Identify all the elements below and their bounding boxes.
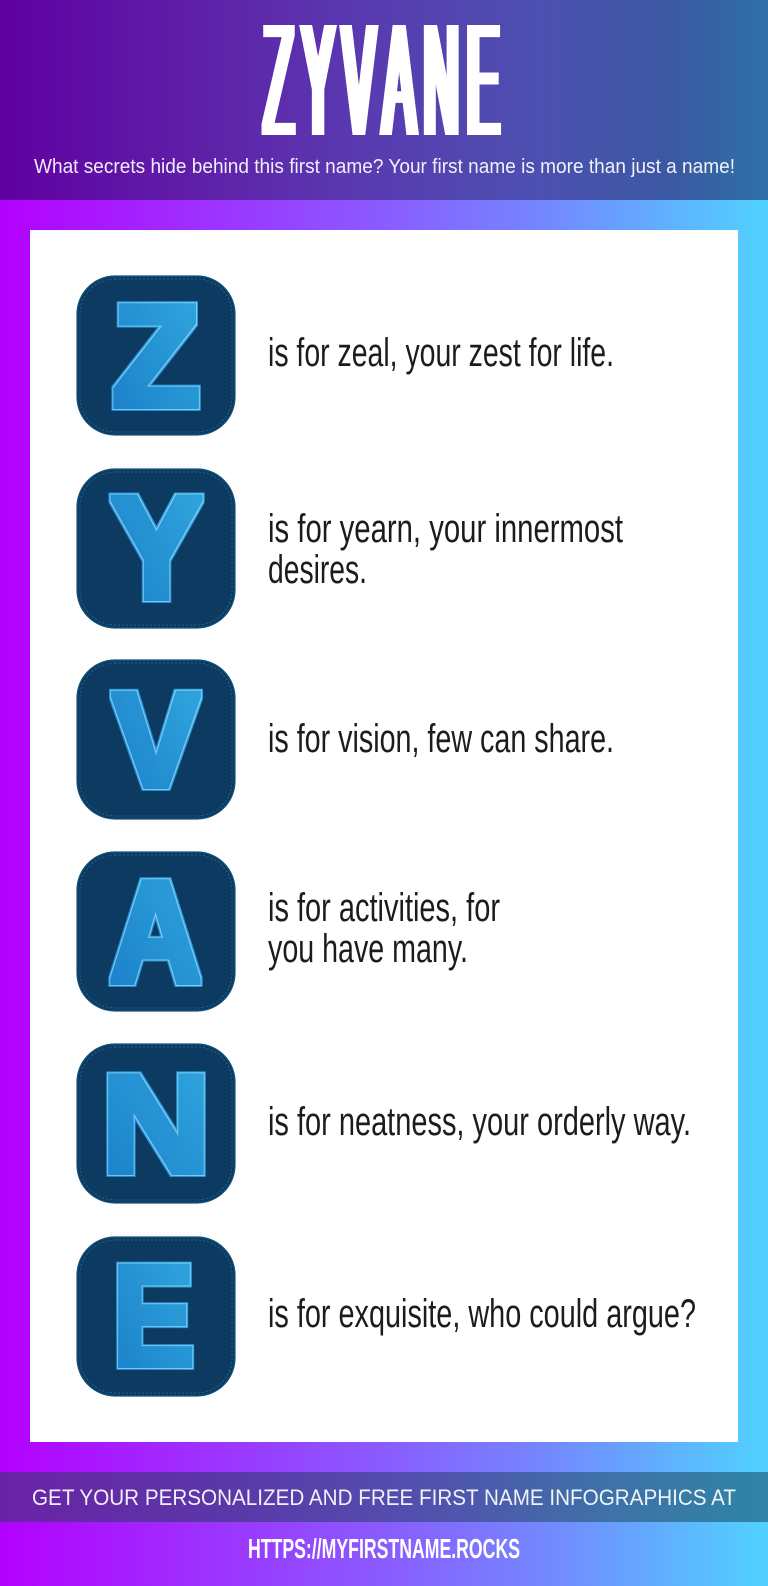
footer call to action: GET YOUR PERSONALIZED AND FREE FIRST NAME INFOGRAPHICS AT [32, 1485, 736, 1510]
icon: letter V: V [113, 666, 199, 815]
header band [0, 0, 768, 200]
text: Y meaning: is for yearn, your innermost [268, 507, 623, 551]
panel: letter meanings [30, 230, 738, 1442]
icon: letter N: N [101, 1047, 211, 1202]
icon: letter Y: Y [111, 466, 202, 629]
text: A meaning: you have many. [268, 927, 468, 971]
icon: letter E [77, 1237, 235, 1396]
icon: letter V [77, 660, 235, 819]
row: Z [77, 275, 614, 437]
icon: letter A [77, 851, 235, 1013]
row: A [77, 851, 500, 1013]
icon: letter E: E [113, 1237, 194, 1396]
text: V meaning: is for vision, few can share. [268, 717, 614, 761]
row: E [77, 1237, 696, 1396]
row: N [77, 1044, 691, 1203]
text: Y meaning [268, 507, 623, 592]
icon: letter Z [77, 275, 235, 437]
footer band [0, 1472, 768, 1522]
icon: letter Z: Z [112, 275, 200, 437]
text: A meaning: is for activities, for [268, 886, 500, 930]
text: Z meaning: is for zeal, your zest for life. [268, 331, 614, 375]
icon: letter N [77, 1044, 235, 1203]
subtitle: What secrets hide behind this first name? Your first name is more than just a name! [34, 156, 735, 178]
row: V [77, 660, 614, 819]
row: Y [77, 466, 623, 629]
text: Y meaning: desires. [268, 548, 367, 592]
icon: letter Y [77, 466, 235, 629]
icon: letter A: A [110, 851, 201, 1013]
footer url: HTTPS://MYFIRSTNAME.ROCKS [248, 1533, 520, 1564]
text: A meaning [268, 886, 500, 971]
